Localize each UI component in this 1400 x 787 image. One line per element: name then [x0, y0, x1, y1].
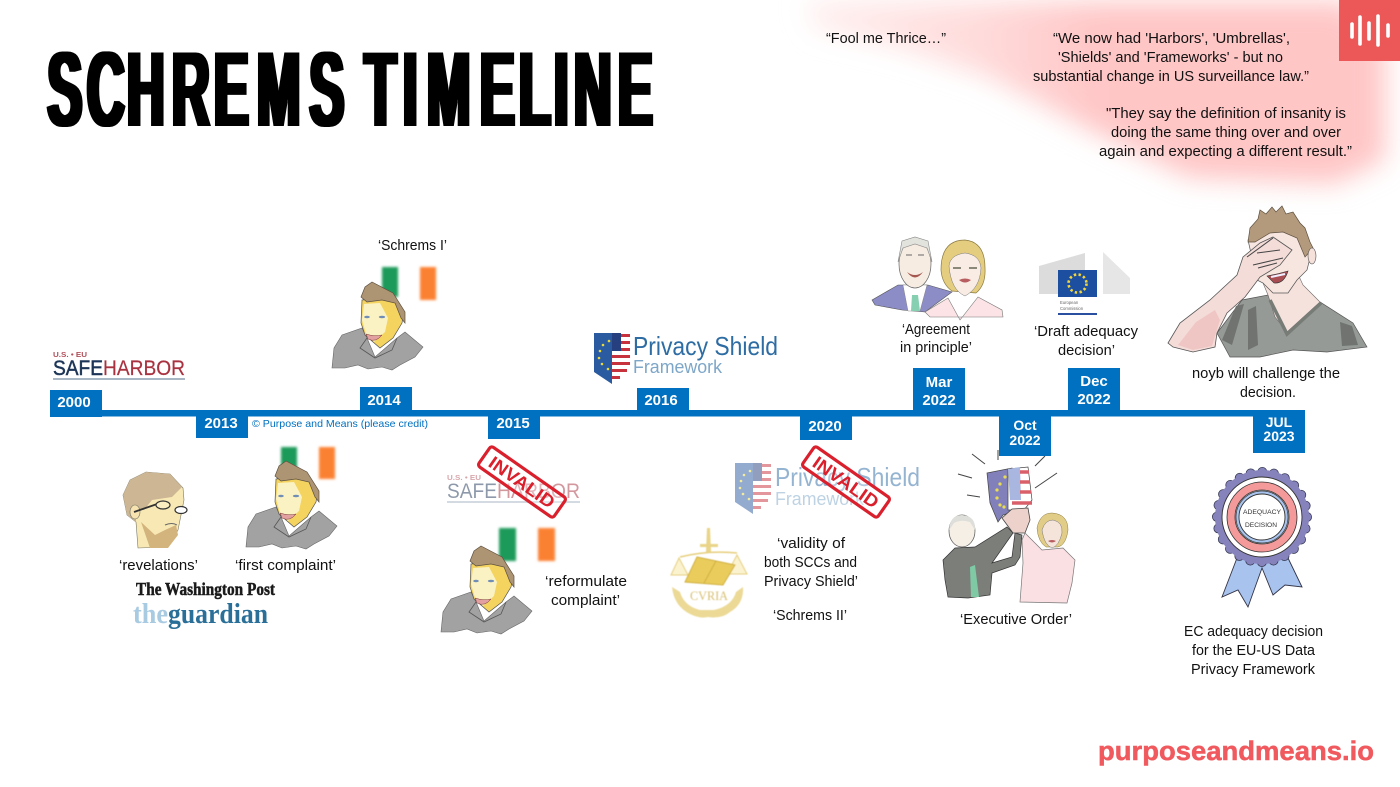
faded logo: Safe Harbor: SAFE [447, 480, 497, 503]
year 2013: 2013 [204, 415, 238, 432]
year 2020: 2020 [808, 418, 842, 435]
label: reformulate complaint: ‘reformulate [545, 573, 627, 590]
rosette text: DECISION [1245, 523, 1277, 529]
quote: harbors and umbrellas [1033, 30, 1309, 85]
year 2015: 2015 [496, 415, 530, 432]
quote: harbors and umbrellas: 'Shields' and 'Frameworks' - but no [1058, 49, 1283, 66]
logo: Safe Harbor: HARBOR [103, 357, 185, 380]
label: EC adequacy decision: for the EU-US Data [1192, 642, 1316, 659]
logo: Privacy Shield: Privacy Shield [633, 331, 778, 361]
date Mar 2022: Mar [926, 374, 952, 391]
quote: harbors and umbrellas: substantial change in US surveillance law.” [1033, 68, 1309, 85]
label: validity and Schrems II [764, 535, 858, 624]
credit line: © Purpose and Means (please credit) [252, 418, 428, 430]
date Oct 2022: 2022 [1009, 432, 1041, 448]
label: agreement in principle [900, 321, 972, 356]
quote: definition of insanity: again and expecting a different result.” [1099, 143, 1352, 160]
faded logo: Privacy Shield [735, 462, 920, 514]
Privacy Shield invalid [735, 446, 920, 518]
label: EC adequacy decision: EC adequacy decision [1184, 623, 1323, 640]
label: draft adequacy decision: ‘Draft adequacy [1034, 323, 1138, 340]
logo: Safe Harbor [53, 350, 185, 380]
label: validity and Schrems II: Privacy Shield’ [764, 573, 858, 590]
title: SCHREMS TIMELINE [47, 29, 653, 149]
label: Schrems I: ‘Schrems I’ [378, 237, 447, 254]
logo: the guardian: the [133, 599, 168, 630]
quote: definition of insanity: "They say the definition of insanity is [1106, 105, 1346, 122]
date Dec 2022: 2022 [1077, 391, 1111, 408]
footer brand: purposeandmeans.io [1098, 736, 1374, 766]
faded logo: Safe Harbor [447, 473, 580, 503]
label: reformulate complaint: complaint’ [551, 592, 620, 609]
illustration: executive order [943, 450, 1075, 603]
label: first complaint: ‘first complaint’ [235, 557, 336, 574]
logo: the guardian: guardian [168, 599, 268, 630]
label: draft adequacy decision: decision’ [1058, 342, 1115, 359]
label: reformulate complaint [545, 573, 627, 609]
logo: Safe Harbor: SAFE [53, 357, 103, 380]
date Mar 2022: 2022 [922, 392, 956, 409]
illustration: facepalm [1168, 206, 1367, 357]
quote: definition of insanity [1099, 105, 1352, 160]
logo: Safe Harbor: U.S. • EU [53, 350, 87, 359]
Schrems I: portrait and flag [332, 237, 447, 370]
label: agreement in principle: in principle’ [900, 339, 972, 356]
logo: the guardian [133, 599, 268, 630]
emblem: Curia: CVRIA [690, 588, 729, 603]
date Jul 2023: JUL [1266, 414, 1293, 430]
logo: Privacy Shield [594, 331, 778, 384]
logo: Privacy Shield: Framework [633, 357, 723, 377]
year 2000: 2000 [57, 394, 91, 411]
year 2014: 2014 [367, 392, 401, 409]
faded logo: Privacy Shield: Framework [775, 489, 865, 509]
label: noyb will challenge [1192, 365, 1340, 401]
label: validity and Schrems II: ‘Schrems II’ [773, 607, 847, 624]
logo icon: sound bars [1339, 0, 1400, 61]
year 2015 [488, 412, 540, 439]
year 2016: 2016 [644, 392, 678, 409]
quote: definition of insanity: doing the same thing over and over [1111, 124, 1341, 141]
date Jul 2023: 2023 [1263, 428, 1295, 444]
logo: European Commission [1039, 252, 1130, 315]
label: EC adequacy decision: Privacy Framework [1191, 661, 1315, 678]
faded logo: Privacy Shield: Privacy Shield [775, 462, 920, 492]
reformulate complaint: portrait and flag [441, 528, 627, 634]
illustration: adequacy rosette [1216, 471, 1308, 607]
label: EC adequacy decision [1184, 623, 1323, 678]
first complaint: portrait and flag [235, 447, 337, 574]
label: validity and Schrems II: both SCCs and [764, 554, 857, 571]
faded logo: Safe Harbor: HARBOR [497, 480, 580, 503]
pink quote background [805, 2, 1385, 184]
timeline bar [50, 410, 1305, 416]
logo: The Washington Post: The Washington Post [136, 579, 275, 599]
portrait: Snowden [123, 472, 187, 548]
ribbons [1222, 558, 1302, 607]
label: noyb will challenge: decision. [1240, 384, 1296, 401]
label: executive order: ‘Executive Order’ [960, 611, 1072, 628]
date Oct 2022: Oct [1013, 417, 1037, 433]
faded logo: Safe Harbor: U.S. • EU [447, 473, 481, 482]
label: draft adequacy decision [1034, 323, 1138, 359]
logo: European Commission: Commission [1060, 306, 1084, 311]
quote: harbors and umbrellas: “We now had 'Harbors', 'Umbrellas', [1053, 30, 1290, 47]
quotes [826, 30, 1352, 160]
stamp: invalid [477, 446, 567, 518]
year 2014 [360, 387, 412, 413]
stamp: invalid [801, 446, 891, 518]
year 2013 [196, 412, 248, 438]
date Dec 2022 [1068, 368, 1120, 413]
label: revelations: ‘revelations’ [119, 557, 198, 574]
quote: fool me thrice: “Fool me Thrice…” [826, 30, 946, 47]
logo: European Commission: European [1060, 300, 1079, 305]
rosette text [1243, 509, 1282, 529]
Safe Harbor invalid [447, 446, 580, 518]
date Jul 2023 [1253, 413, 1305, 453]
year 2020 [800, 412, 852, 440]
date Dec 2022: Dec [1080, 373, 1108, 390]
illustration: leaders agreement [872, 237, 1003, 320]
label: validity and Schrems II: ‘validity of [777, 535, 846, 552]
label: agreement in principle: ‘Agreement [902, 321, 971, 338]
year 2016 [637, 388, 689, 413]
date Oct 2022 [999, 413, 1051, 456]
rosette text: ADEQUACY [1243, 509, 1282, 516]
label: noyb will challenge: noyb will challenge the [1192, 365, 1340, 382]
date Mar 2022 [913, 368, 965, 413]
emblem: Curia [671, 528, 747, 618]
timeline [50, 368, 1305, 456]
year 2000 [50, 390, 102, 417]
